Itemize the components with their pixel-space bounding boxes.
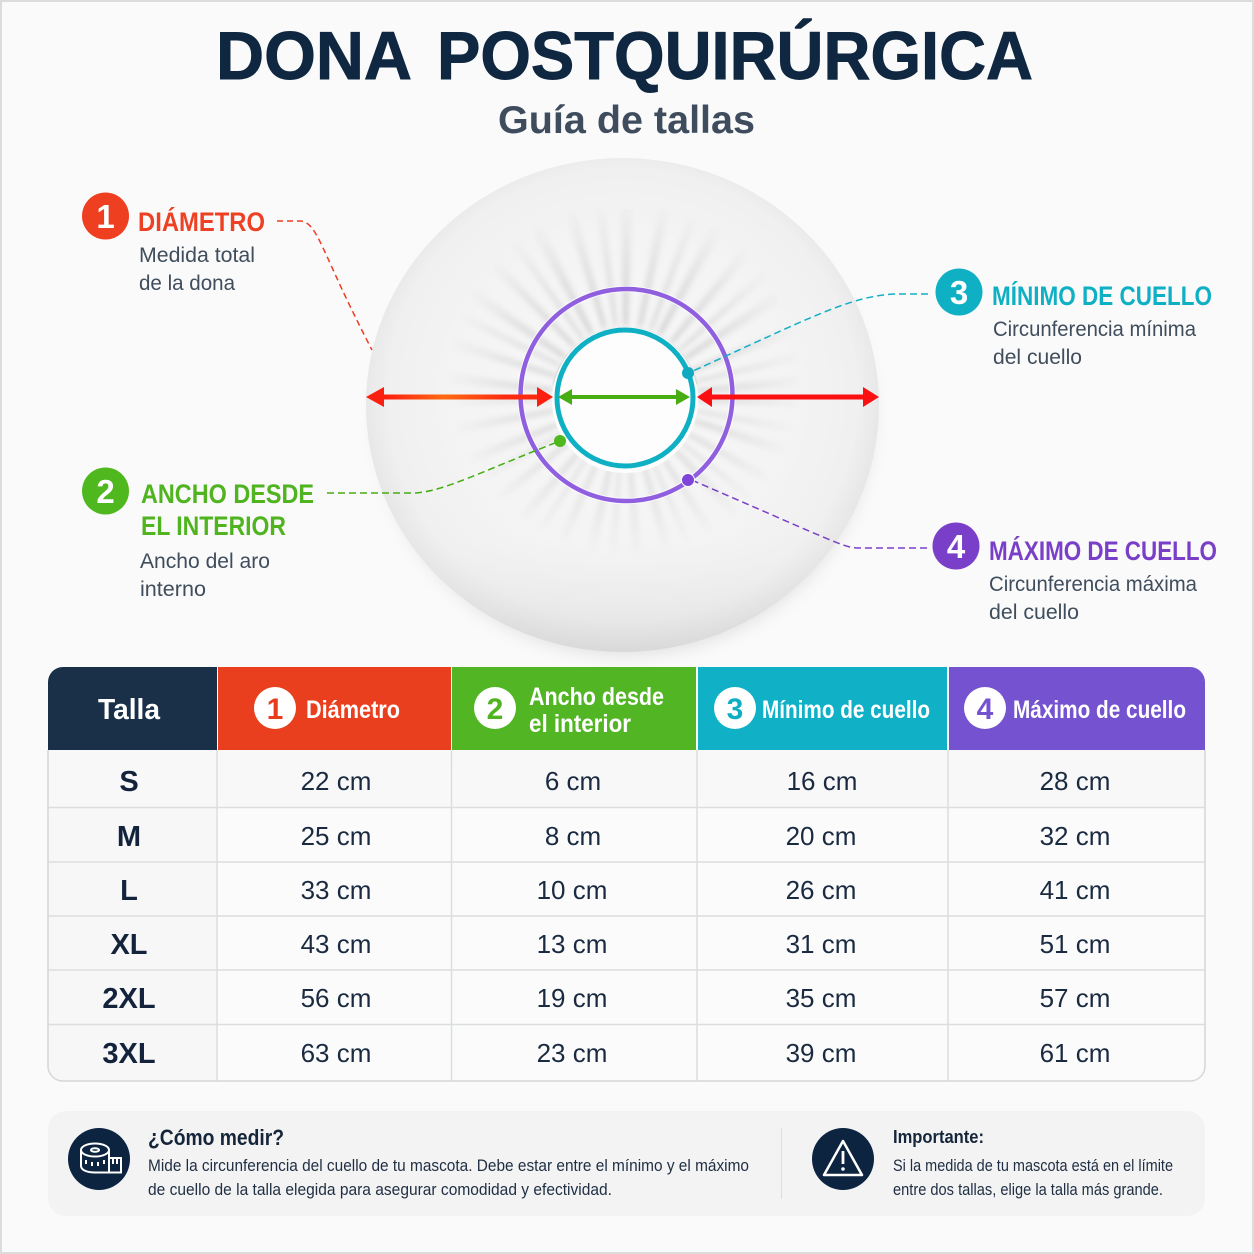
callout 3: minimo de cuello: MÍNIMO DE CUELLO	[992, 280, 1212, 311]
header: minimo de cuello	[714, 687, 930, 729]
header: ancho desde el interior: el interior	[529, 710, 631, 738]
header: ancho desde el interior: 2	[487, 693, 503, 726]
size table	[48, 667, 1205, 1081]
row S: S	[119, 766, 139, 798]
header: talla: Talla	[98, 694, 161, 726]
row L: 41 cm	[1040, 875, 1110, 905]
header: maximo de cuello: Máximo de cuello	[1013, 696, 1186, 724]
row 2XL: 56 cm	[301, 983, 371, 1013]
how to measure text: Mide la circunferencia del cuello de tu mascota. Debe estar entre el mínimo y el máximo	[148, 1157, 749, 1175]
row 3XL: 23 cm	[537, 1038, 607, 1068]
callout 4: maximo de cuello: Circunferencia máxima	[989, 573, 1197, 596]
row S: 16 cm	[787, 766, 857, 796]
row L: 10 cm	[537, 875, 607, 905]
header: diametro: Diámetro	[306, 696, 400, 724]
callout 4: maximo de cuello	[682, 474, 1217, 624]
row S: 22 cm	[301, 766, 371, 796]
row XL: 51 cm	[1040, 929, 1110, 959]
row L	[120, 875, 1110, 907]
arrow: diameter right	[697, 387, 879, 407]
row XL: 31 cm	[786, 929, 856, 959]
important text	[893, 1127, 1173, 1199]
callout 1: diametro: 1	[96, 198, 115, 235]
callout 2: ancho desde el interior	[82, 435, 566, 601]
subtitle: Guía de tallas	[498, 99, 755, 142]
row 3XL: 63 cm	[301, 1038, 371, 1068]
callout 3: minimo de cuello: 3	[950, 274, 968, 311]
how to measure text: de cuello de la talla elegida para asegurar comodidad y efectividad.	[148, 1181, 612, 1199]
callout 3: minimo de cuello: del cuello	[993, 346, 1082, 369]
arrow: diameter left	[366, 387, 553, 407]
row L: L	[120, 875, 138, 907]
callout 4: maximo de cuello: del cuello	[989, 601, 1079, 624]
footer panel	[48, 1111, 1205, 1216]
how to measure text: ¿Cómo medir?	[148, 1125, 284, 1150]
row S: 6 cm	[545, 766, 601, 796]
row 2XL: 19 cm	[537, 983, 607, 1013]
row 3XL: 3XL	[102, 1038, 156, 1070]
callout 1: diametro: Medida total	[139, 244, 255, 267]
icon: warning	[812, 1128, 874, 1190]
row S: 28 cm	[1040, 766, 1110, 796]
icon: measuring tape	[68, 1128, 130, 1190]
header: diametro	[254, 687, 400, 729]
row XL	[110, 929, 1110, 961]
measurement rings	[520, 289, 732, 501]
arrow: inner width	[558, 389, 690, 405]
callout 1: diametro: DIÁMETRO	[138, 206, 265, 237]
callout 2: ancho desde el interior: 2	[96, 473, 115, 510]
callout 2: ancho desde el interior: EL INTERIOR	[141, 511, 286, 541]
row 2XL	[102, 983, 1110, 1015]
table body background	[48, 667, 1205, 1081]
important text: Si la medida de tu mascota está en el límite	[893, 1157, 1173, 1175]
callout 2: ancho desde el interior: Ancho del aro	[140, 550, 270, 573]
row 3XL	[102, 1038, 1110, 1070]
callout 3: minimo de cuello: Circunferencia mínima	[993, 318, 1196, 341]
row M	[117, 821, 1110, 853]
row 3XL: 39 cm	[786, 1038, 856, 1068]
row M: 25 cm	[301, 821, 371, 851]
header: maximo de cuello	[964, 687, 1186, 729]
header: minimo de cuello: 3	[727, 693, 743, 726]
important text: entre dos tallas, elige la talla más grande.	[893, 1181, 1163, 1199]
how to measure text	[148, 1125, 749, 1199]
row M: 20 cm	[786, 821, 856, 851]
callout 1: diametro: de la dona	[139, 272, 235, 295]
callout 1: diametro	[82, 192, 372, 350]
row 2XL: 57 cm	[1040, 983, 1110, 1013]
important text: Importante:	[893, 1127, 984, 1147]
header: ancho desde el interior: Ancho desde	[529, 683, 664, 711]
callout 3: minimo de cuello	[682, 268, 1212, 379]
header: minimo de cuello: Mínimo de cuello	[762, 696, 930, 724]
callout 4: maximo de cuello: 4	[947, 528, 966, 565]
callout 2: ancho desde el interior: interno	[140, 578, 206, 601]
row M: M	[117, 821, 141, 853]
title: DONA	[216, 18, 412, 94]
row L: 33 cm	[301, 875, 371, 905]
header: ancho desde el interior	[474, 683, 664, 738]
row L: 26 cm	[786, 875, 856, 905]
row XL: 13 cm	[537, 929, 607, 959]
callout 2: ancho desde el interior: ANCHO DESDE	[141, 479, 314, 509]
header: maximo de cuello: 4	[977, 693, 994, 726]
row XL: 43 cm	[301, 929, 371, 959]
header: diametro: 1	[267, 693, 283, 726]
row 2XL: 2XL	[102, 983, 156, 1015]
row M: 8 cm	[545, 821, 601, 851]
row 2XL: 35 cm	[786, 983, 856, 1013]
row M: 32 cm	[1040, 821, 1110, 851]
row 3XL: 61 cm	[1040, 1038, 1110, 1068]
row XL: XL	[110, 929, 148, 961]
donut illustration	[366, 158, 879, 654]
row S	[119, 766, 1110, 798]
title: POSTQUIRÚRGICA	[437, 18, 1033, 94]
